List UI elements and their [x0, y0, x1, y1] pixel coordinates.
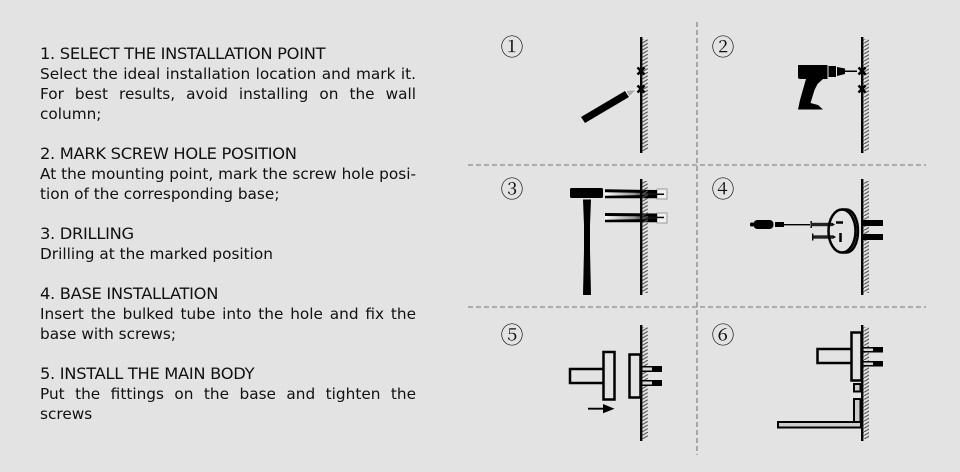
wall [861, 325, 869, 441]
body: step 5 [40, 385, 416, 423]
body: step 4 [40, 305, 416, 343]
body: step 5: screws [40, 405, 92, 423]
anchor caps [657, 189, 667, 223]
number 5: ⑤ [500, 317, 524, 350]
x marks [858, 68, 866, 92]
pencil [581, 90, 636, 123]
base disc [828, 210, 858, 252]
wall [640, 325, 648, 441]
panel 5: install the body [500, 317, 662, 441]
hammer [570, 188, 603, 295]
heading: step 1: 1. SELECT THE INSTALLATION POINT [40, 44, 325, 63]
body: step 1: For best results, avoid installing on the wall [40, 85, 416, 103]
anchor 1 [605, 189, 664, 198]
screws [810, 221, 836, 240]
heading: step 2: 2. MARK SCREW HOLE POSITION [40, 144, 297, 163]
anchors [863, 347, 883, 366]
panel 2: drill [712, 29, 869, 153]
body: step 1: Select the ideal installation location and mark it. [40, 65, 416, 83]
anchors [863, 220, 883, 240]
wall [861, 179, 869, 295]
step 2 text [40, 144, 416, 203]
heading: step 4: 4. BASE INSTALLATION [40, 284, 218, 303]
towel bar [778, 399, 861, 428]
body: step 4: base with screws; [40, 325, 176, 343]
step 5 text [40, 364, 416, 423]
step 1 text [40, 44, 416, 123]
panel 1: mark the point [500, 29, 648, 153]
wall [861, 37, 869, 153]
arrow [588, 404, 614, 413]
x marks [638, 68, 644, 92]
panel 3: hammer and anchors [500, 171, 667, 295]
base [630, 354, 640, 398]
connector block [854, 384, 860, 392]
number 4: ④ [712, 171, 734, 204]
body: step 2 [40, 165, 416, 203]
body: step 4: Insert the bulked tube into the hole and fix the [40, 305, 416, 323]
body: step 3: Drilling at the marked position [40, 245, 273, 263]
main body [570, 352, 614, 400]
body: step 2: At the mounting point, mark the screw hole posi- [40, 165, 416, 183]
step 3 text [40, 224, 273, 263]
number 3: ③ [500, 171, 524, 204]
number 2: ② [712, 29, 734, 62]
number 6: ⑥ [712, 317, 734, 350]
drill [798, 65, 857, 110]
step 4 text [40, 284, 416, 343]
panel 4: base and screws [712, 171, 883, 295]
main body [818, 332, 862, 380]
body: step 5: Put the fittings on the base and tighten the [40, 385, 416, 403]
anchors [642, 366, 662, 386]
body: step 1: column; [40, 105, 101, 123]
wall [640, 179, 648, 295]
anchor 2 [605, 213, 664, 222]
screwdriver [750, 220, 810, 229]
body: step 1 [40, 65, 416, 123]
number 1: ① [500, 29, 524, 62]
heading: step 3: 3. DRILLING [40, 224, 134, 243]
heading: step 5: 5. INSTALL THE MAIN BODY [40, 364, 254, 383]
panel 6: completed fitting [712, 317, 883, 441]
body: step 2: tion of the corresponding base; [40, 185, 279, 203]
wall [640, 37, 648, 153]
